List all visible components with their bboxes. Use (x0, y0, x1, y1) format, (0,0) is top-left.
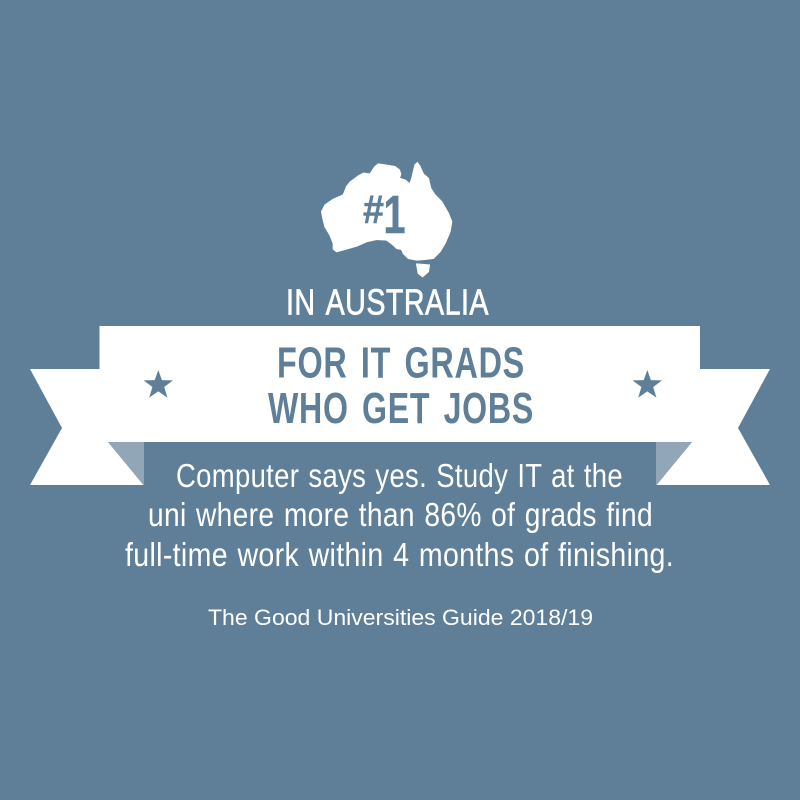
right ribbon tail (656, 369, 770, 485)
heading: in Australia: IN AUSTRALIA (286, 282, 489, 322)
source citation: The Good Universities Guide 2018/19 (208, 605, 593, 630)
body text: full-time work within 4 months of finishing. (125, 537, 674, 574)
icon: right star (633, 370, 662, 398)
left ribbon tail (30, 369, 144, 485)
ribbon heading (268, 338, 534, 433)
rank hash sign: # (363, 188, 384, 232)
ribbon banner (30, 326, 770, 485)
body text: uni where more than 86% of grads find (148, 497, 653, 534)
ribbon main band (100, 326, 700, 442)
ribbon heading: WHO GET JOBS (268, 384, 534, 433)
icon: Australia map with #1 (322, 163, 452, 277)
body text (125, 458, 674, 574)
right fold (656, 442, 692, 485)
left fold (108, 442, 144, 485)
rank number: 1 (384, 185, 406, 245)
body text: Computer says yes. Study IT at the (176, 458, 623, 495)
map outline (322, 163, 452, 277)
icon: left star (144, 370, 173, 398)
ribbon heading: FOR IT GRADS (277, 338, 525, 388)
